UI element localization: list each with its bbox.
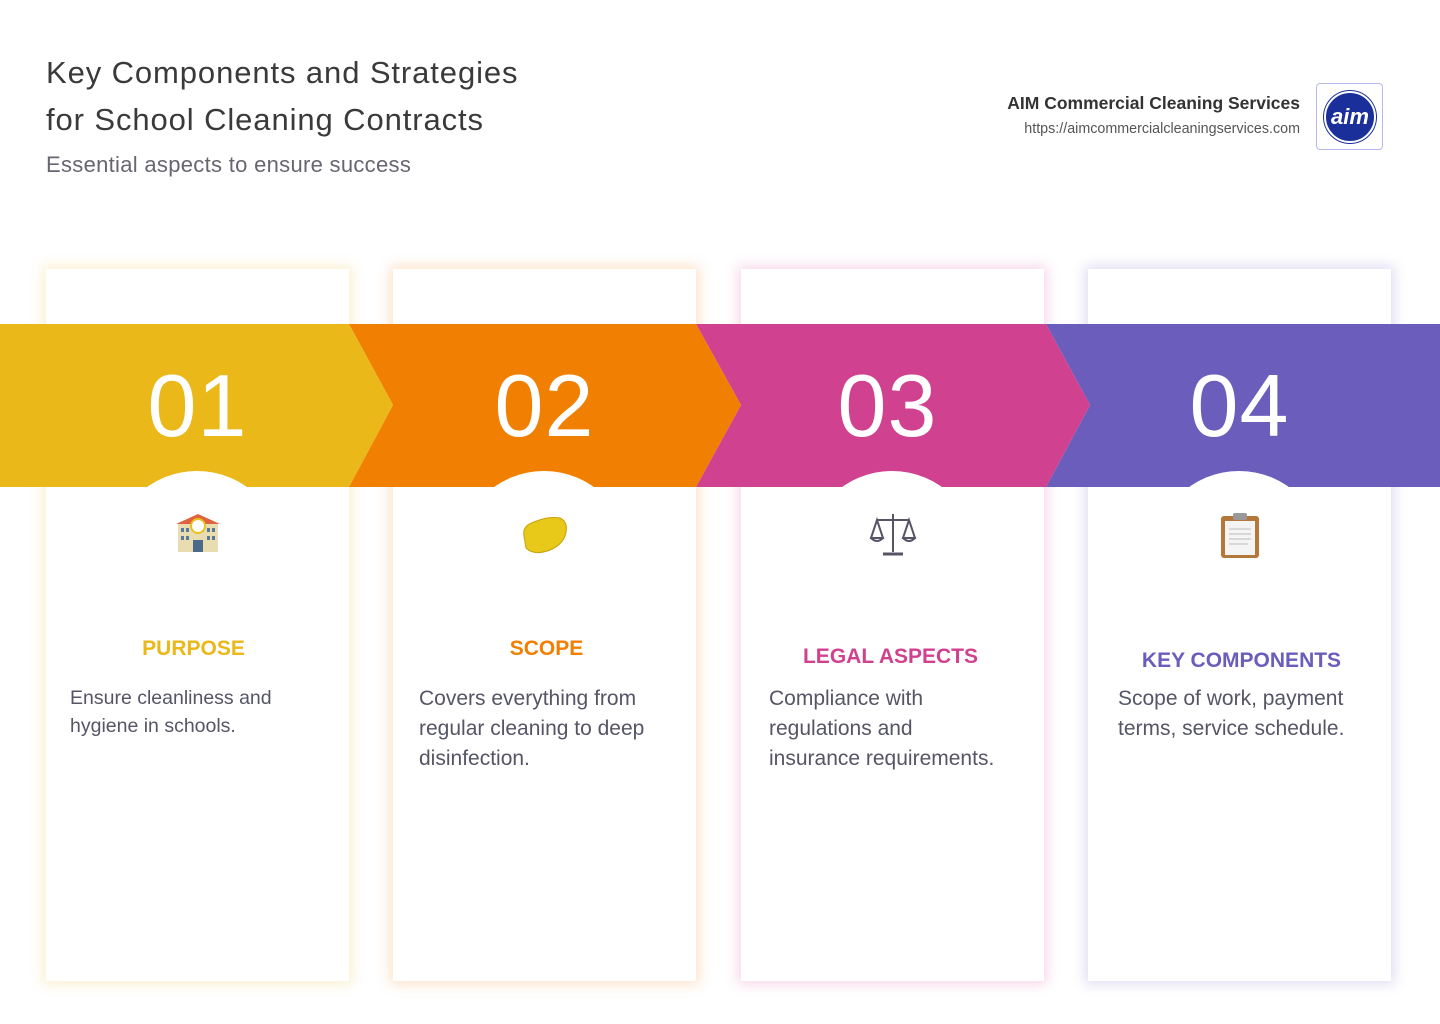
logo	[1316, 83, 1383, 150]
text: 04	[1190, 356, 1289, 455]
text: 02	[495, 356, 594, 455]
brand name: AIM Commercial Cleaning Services	[1007, 93, 1300, 113]
panel 4 text: terms, service schedule.	[1118, 717, 1344, 740]
panel 2 text	[419, 687, 644, 770]
panel 3 text: regulations and	[769, 717, 913, 740]
icon: school	[176, 514, 220, 552]
panel 4 heading: KEY COMPONENTS	[1142, 649, 1341, 672]
panel 2 heading: SCOPE	[510, 637, 583, 660]
numbers: 01	[148, 356, 247, 455]
icon: scales	[870, 514, 916, 556]
panel 3 text: insurance requirements.	[769, 747, 994, 770]
circles	[111, 471, 283, 643]
panel 3 text	[769, 687, 994, 770]
panel 1 heading: PURPOSE	[142, 637, 245, 660]
card shadows / cards	[46, 269, 349, 981]
text: 03	[838, 356, 937, 455]
title: for School Cleaning Contracts	[46, 102, 484, 137]
title: Key Components and Strategies	[46, 55, 518, 90]
panel 2 text: regular cleaning to deep	[419, 717, 644, 740]
panel 4 text	[1118, 687, 1344, 740]
icon: sponge	[523, 517, 567, 554]
subtitle: Essential aspects to ensure success	[46, 152, 411, 177]
brand block	[1007, 83, 1383, 150]
panel 3 heading: LEGAL ASPECTS	[803, 645, 978, 668]
title	[46, 55, 518, 137]
logo: aim	[1331, 104, 1369, 129]
panel 2 text: Covers everything from	[419, 687, 636, 710]
brand url: https://aimcommercialcleaningservices.com	[1024, 121, 1300, 137]
icon: clipboard	[1221, 513, 1259, 558]
panel 2 text: disinfection.	[419, 747, 530, 770]
panel 1 text: Ensure cleanliness and	[70, 687, 272, 709]
panel 4 text: Scope of work, payment	[1118, 687, 1343, 710]
arrow band	[0, 324, 1440, 487]
panel 3 text: Compliance with	[769, 687, 923, 710]
panel 1 text: hygiene in schools.	[70, 715, 236, 737]
panel 1 text	[70, 687, 272, 737]
